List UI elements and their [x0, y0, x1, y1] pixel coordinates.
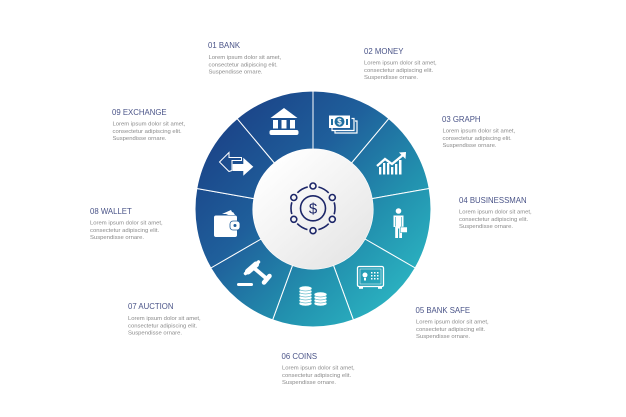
label: 04 businessman	[459, 196, 532, 230]
icon: wallet	[214, 210, 240, 237]
label: 08 wallet: Lorem ipsum dolor sit amet,	[90, 220, 163, 226]
label: 08 wallet: consectetur adipiscing elit.	[90, 228, 159, 234]
label: 08 wallet: 08 WALLET	[90, 207, 132, 216]
icon: money	[329, 116, 357, 133]
label: 07 auction: Lorem ipsum dolor sit amet,	[128, 316, 201, 322]
segment: bank safe	[334, 239, 415, 320]
label: 02 money: Suspendisse ornare.	[364, 75, 418, 81]
label: 09 exchange: 09 EXCHANGE	[112, 108, 167, 117]
label: 01 bank: 01 BANK	[208, 41, 241, 50]
icon: bank safe	[358, 266, 384, 289]
icon: center dollar network: $	[309, 200, 318, 218]
center circle	[253, 149, 373, 269]
label: 04 businessman: 04 BUSINESSMAN	[459, 196, 527, 205]
icon: coins	[299, 286, 327, 306]
label: 02 money	[364, 47, 437, 81]
icon: center dollar network	[286, 182, 340, 235]
label: 03 graph: 03 GRAPH	[442, 115, 481, 124]
label: 05 bank safe: 05 BANK SAFE	[416, 306, 470, 315]
segment: exchange	[197, 119, 274, 199]
label: 08 wallet	[90, 207, 163, 241]
label: 06 coins: Suspendisse ornare.	[282, 380, 336, 386]
label: 02 money: 02 MONEY	[364, 47, 404, 56]
segment: wallet	[195, 188, 261, 268]
segment: businessman	[365, 188, 431, 268]
label: 05 bank safe: Lorem ipsum dolor sit amet,	[416, 320, 489, 326]
segment: auction	[211, 239, 292, 320]
label: 03 graph: consectetur adipiscing elit.	[442, 136, 512, 142]
panel: ring of nine segments	[195, 91, 431, 327]
label: 09 exchange: consectetur adipiscing elit.	[112, 129, 182, 135]
label: 05 bank safe	[416, 306, 489, 340]
segment: bank	[237, 91, 313, 163]
label: 03 graph: Suspendisse ornare.	[442, 143, 497, 149]
label: 01 bank	[208, 41, 282, 76]
label: 01 bank: Lorem ipsum dolor sit amet,	[208, 55, 282, 61]
label: 06 coins: consectetur adipiscing elit.	[282, 373, 351, 379]
label: 09 exchange: Lorem ipsum dolor sit amet,	[112, 122, 186, 128]
label: 06 coins: 06 COINS	[282, 352, 317, 361]
label: 08 wallet: Suspendisse ornare.	[90, 235, 144, 241]
label: 03 graph	[442, 115, 516, 149]
segment: money	[313, 91, 389, 163]
label: 05 bank safe: Suspendisse ornare.	[416, 334, 470, 340]
segment: coins	[273, 265, 353, 327]
segment: graph	[352, 119, 429, 199]
label: 06 coins: Lorem ipsum dolor sit amet,	[282, 366, 355, 372]
icon: graph	[377, 152, 406, 174]
label: 07 auction: 07 AUCTION	[128, 302, 174, 311]
label: 09 exchange: Suspendisse ornare.	[112, 136, 167, 142]
icon: auction	[238, 262, 270, 284]
icon: exchange	[220, 152, 253, 176]
label: 07 auction	[128, 302, 201, 337]
label: 04 businessman: Lorem ipsum dolor sit amet,	[459, 210, 532, 216]
label: 07 auction: Suspendisse ornare.	[128, 331, 182, 337]
icon: money: $	[337, 118, 342, 126]
label: 05 bank safe: consectetur adipiscing elit.	[416, 327, 485, 333]
label: 04 businessman: Suspendisse ornare.	[459, 224, 513, 230]
label: 01 bank: consectetur adipiscing elit.	[208, 62, 278, 68]
label: 04 businessman: consectetur adipiscing elit.	[459, 217, 528, 223]
label: 06 coins	[282, 352, 355, 386]
label: 07 auction: consectetur adipiscing elit.	[128, 323, 197, 329]
label: 02 money: Lorem ipsum dolor sit amet,	[364, 60, 437, 66]
icon: bank	[270, 108, 298, 135]
label: 02 money: consectetur adipiscing elit.	[364, 68, 433, 74]
label: 01 bank: Suspendisse ornare.	[208, 70, 263, 76]
label: 09 exchange	[112, 108, 186, 142]
label: 03 graph: Lorem ipsum dolor sit amet,	[442, 128, 516, 134]
icon: businessman	[394, 208, 407, 238]
